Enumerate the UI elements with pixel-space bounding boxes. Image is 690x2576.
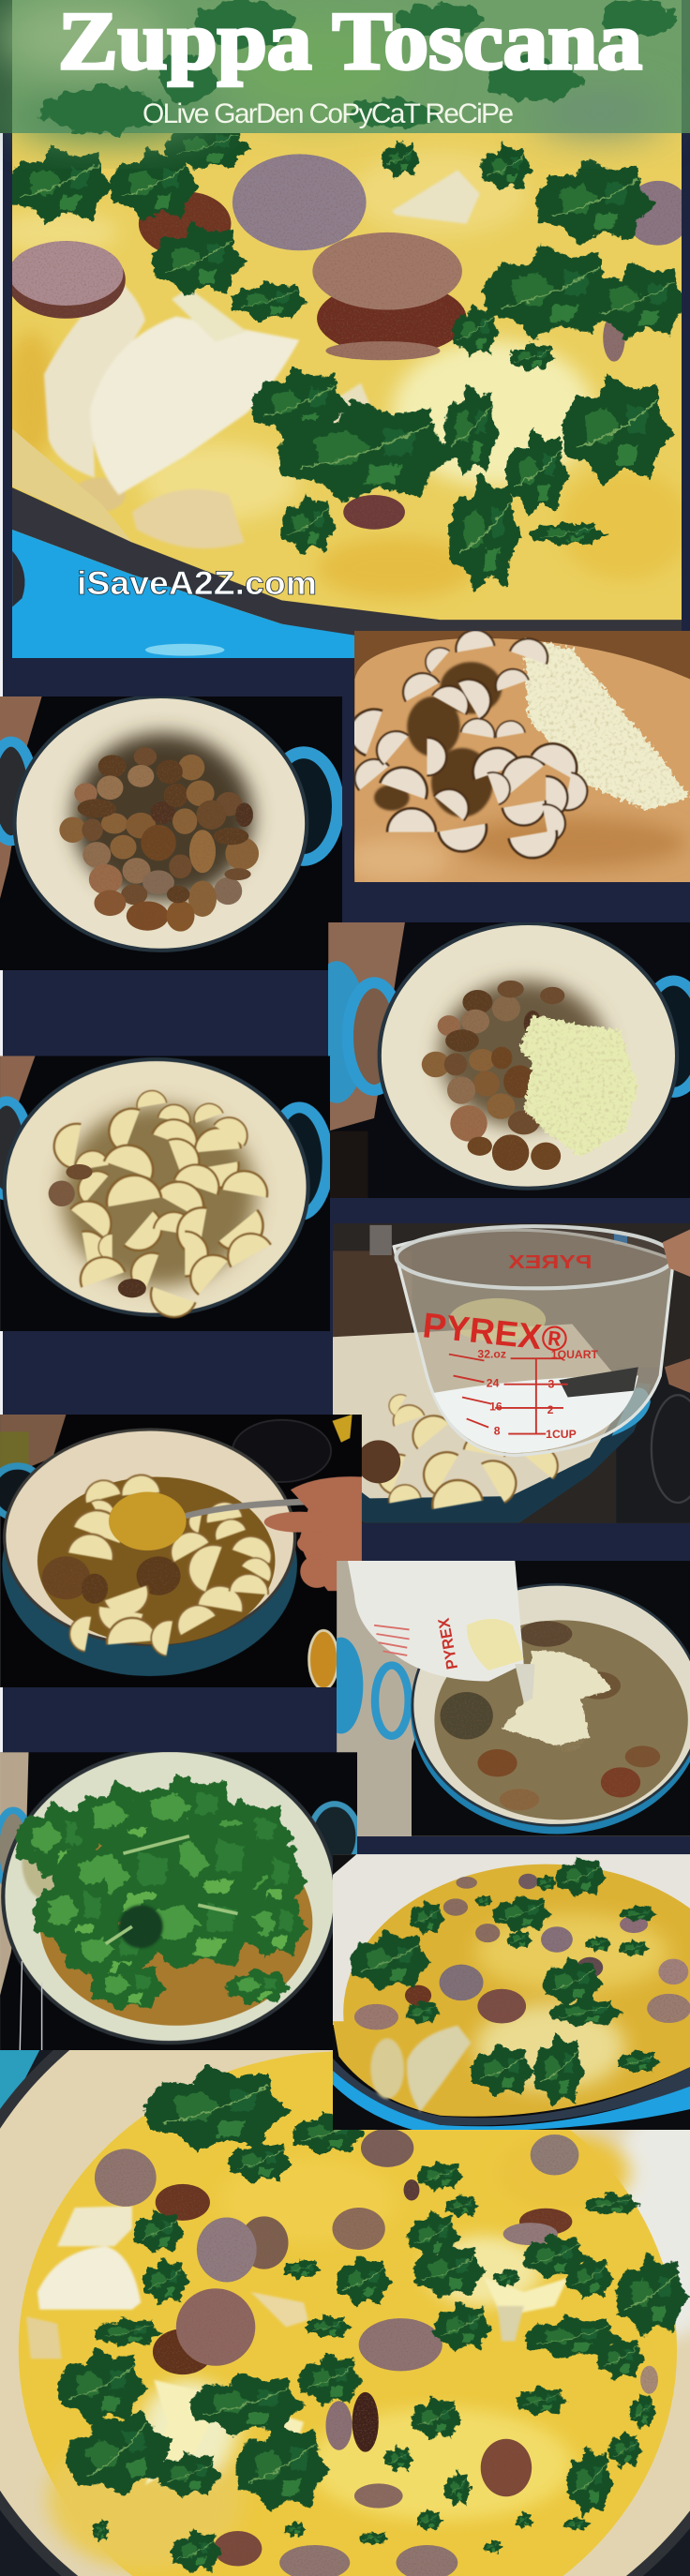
counter	[0, 1415, 66, 1479]
counter	[0, 696, 42, 899]
chopped onions	[519, 1015, 638, 1157]
left handle	[0, 1810, 31, 1888]
hero pot rim	[12, 487, 682, 636]
side bowl	[309, 1630, 338, 1689]
stove rail	[20, 1961, 42, 2056]
chopped onion pile	[524, 638, 690, 811]
small soup kale lower	[471, 2032, 660, 2107]
hand holding spoon	[264, 1476, 362, 1591]
pot rim outer	[0, 1939, 690, 2576]
black stove bottom	[333, 2025, 690, 2130]
banner soft tones	[0, 0, 666, 141]
hero cream inner wall	[8, 427, 132, 542]
panel: browned sausage in pot	[0, 696, 343, 972]
measurement labels: 1QUART	[551, 1348, 599, 1361]
kale stems light	[106, 1836, 238, 1944]
pot interior shade	[72, 733, 253, 901]
sausage slices	[354, 1874, 690, 2029]
left handle	[0, 741, 33, 841]
hero sausage slices	[7, 154, 690, 530]
right handle	[655, 975, 690, 1098]
white pot wall	[333, 1854, 690, 2027]
sausage pieces	[59, 747, 259, 932]
kitchen backdrop	[333, 1221, 690, 1526]
measurement labels: 24	[487, 1377, 500, 1389]
soup tones	[49, 2134, 629, 2569]
light back panel	[369, 1225, 392, 1255]
pour stream	[515, 1664, 534, 1702]
pale soup zones	[475, 1913, 669, 2090]
right handle	[269, 753, 338, 860]
potatoes in pot	[372, 1390, 566, 1509]
kale leaves	[350, 1856, 658, 2027]
measurement labels: 8	[494, 1425, 501, 1437]
potato chunks	[26, 2206, 524, 2359]
glass rim	[397, 1226, 673, 1288]
right handle	[310, 1804, 359, 1868]
small soup contents	[350, 1856, 690, 2112]
counter wood	[352, 627, 690, 886]
potato slices	[67, 1474, 278, 1655]
interior shade	[441, 981, 608, 1127]
stovetop	[0, 1056, 331, 1332]
measurement labels: 16	[489, 1400, 502, 1413]
dark stovetop right	[616, 1367, 690, 1523]
pot interior shade	[62, 1105, 255, 1286]
reversed back label: PYREX	[508, 1252, 592, 1273]
panel: title banner	[0, 0, 690, 141]
wood grain tone	[343, 817, 686, 881]
measurement labels	[477, 1347, 599, 1441]
soup surface	[343, 1865, 690, 2161]
broth	[38, 1476, 275, 1644]
cream pot wall	[0, 1949, 690, 2576]
potato pieces	[51, 1088, 273, 1324]
measurement scale	[449, 1355, 568, 1434]
blue rim	[333, 2071, 690, 2131]
hero blue pot body	[0, 525, 366, 658]
left white edge strip	[0, 133, 3, 2050]
subtitle: OLive GarDen CoPyCaT ReCiPe	[142, 98, 514, 129]
fingers at cup	[665, 1358, 690, 1393]
cup potato reflection	[449, 1298, 546, 1341]
panel: potatoes added to pot	[0, 1056, 331, 1332]
upper part of small photo	[333, 1854, 690, 2161]
black corner	[333, 1854, 356, 1875]
teal lid	[319, 1638, 363, 1734]
lower part of small photo	[333, 2021, 690, 2131]
oven display glow	[614, 1233, 627, 1245]
banner sage base	[0, 0, 690, 133]
banner right edge	[682, 0, 690, 133]
milk swirl	[502, 1651, 612, 1745]
stovetop	[0, 696, 343, 972]
pot interior	[5, 1430, 295, 1644]
counter	[0, 1056, 36, 1148]
left handle	[0, 1466, 44, 1518]
measuring cup glass	[394, 1230, 673, 1455]
teal lid	[328, 961, 359, 1103]
teal lid corner	[0, 2050, 39, 2113]
hand at cup	[663, 1229, 690, 1277]
kale leaves	[49, 2064, 689, 2574]
left handle	[375, 1666, 409, 1736]
measurement labels: 3	[548, 1378, 555, 1390]
stovetop black	[412, 1561, 690, 1836]
yellow packet	[332, 1415, 352, 1443]
spoon of bouillon	[109, 1492, 312, 1550]
sliced potatoes	[343, 627, 591, 861]
pot inner cream	[333, 1324, 629, 1498]
dark stove background	[0, 2045, 690, 2576]
panel: kale added to pot	[0, 1750, 359, 2056]
jar on counter	[0, 1431, 29, 1473]
sausage shade in pot	[356, 1440, 400, 1483]
sausage in soup	[441, 1621, 660, 1810]
left handle	[0, 1101, 29, 1196]
pot teal rim	[612, 1387, 651, 1436]
measuring cup	[348, 1561, 524, 1682]
sausage pieces	[422, 981, 564, 1171]
cutting board	[354, 638, 690, 886]
watermark: iSaveA2Z.com	[77, 565, 317, 602]
sausage in broth	[42, 1556, 180, 1604]
measurement labels: 32.oz	[477, 1347, 506, 1360]
sideways cup label: PYREX	[435, 1617, 461, 1670]
hero onion pieces	[72, 170, 480, 548]
cream in cup	[467, 1619, 524, 1670]
cup dark reflection	[559, 1367, 638, 1398]
panel: cutting board photo	[343, 627, 690, 886]
leftover sausage	[49, 1164, 146, 1297]
cream wall shadow	[22, 1823, 75, 1901]
pot body	[2, 1454, 297, 1676]
hero soup highlights	[0, 151, 690, 598]
stovetop	[0, 1415, 362, 1690]
sausage slices	[95, 2129, 658, 2576]
panel: hero soup photo	[12, 133, 682, 658]
pot	[14, 696, 307, 951]
pot body	[411, 1589, 690, 1834]
stove lid outline	[652, 1395, 690, 1503]
panel: finished soup small photo	[333, 1854, 690, 2161]
counter	[328, 922, 405, 1131]
pot	[380, 923, 677, 1189]
burner ring	[232, 1420, 331, 1482]
soup surface	[19, 2051, 677, 2576]
panel: spoon adding bouillon	[0, 1415, 362, 1690]
back cabinet	[333, 1251, 412, 1350]
right handle	[271, 1107, 328, 1215]
counter	[0, 1752, 29, 1996]
cup scale marks	[374, 1625, 410, 1655]
front label: PYREX®	[421, 1307, 569, 1360]
pot	[3, 1750, 336, 2043]
banner left edge	[0, 0, 12, 133]
soup lower	[333, 2021, 690, 2117]
panel: onions added to pot	[306, 922, 690, 1199]
hero pot handle gap	[12, 551, 25, 607]
pale right wall	[603, 2105, 690, 2338]
counter	[337, 1561, 690, 1840]
soup mixture	[434, 1620, 688, 1820]
water inside cup	[433, 1376, 638, 1453]
milky pools	[145, 2278, 568, 2485]
left handle	[348, 982, 400, 1090]
hero potato chunks	[44, 279, 299, 495]
soup bed	[39, 1819, 312, 2026]
hero soup surface	[12, 133, 682, 626]
stovetop	[328, 922, 690, 1199]
kale dark center	[119, 1905, 163, 1948]
pot	[5, 1059, 308, 1315]
banner muted kale	[42, 0, 675, 133]
hero kale leaves	[8, 121, 690, 593]
pot body	[333, 1341, 652, 1523]
panel: pouring cream into soup	[319, 1561, 690, 1840]
potato peel shadow	[374, 662, 502, 817]
measurement labels: 2	[548, 1403, 554, 1416]
pot interior	[412, 1584, 690, 1825]
hero blue highlight	[145, 644, 224, 656]
dark drawer	[328, 1131, 368, 1199]
kale pile	[15, 1775, 308, 2012]
dark rim	[333, 2059, 690, 2125]
measurement labels: 1CUP	[546, 1428, 577, 1441]
potatoes	[370, 2026, 471, 2112]
stovetop	[0, 1752, 357, 2054]
panel: final soup large photo	[0, 1939, 690, 2576]
panel: pyrex water pour	[333, 1221, 690, 1526]
